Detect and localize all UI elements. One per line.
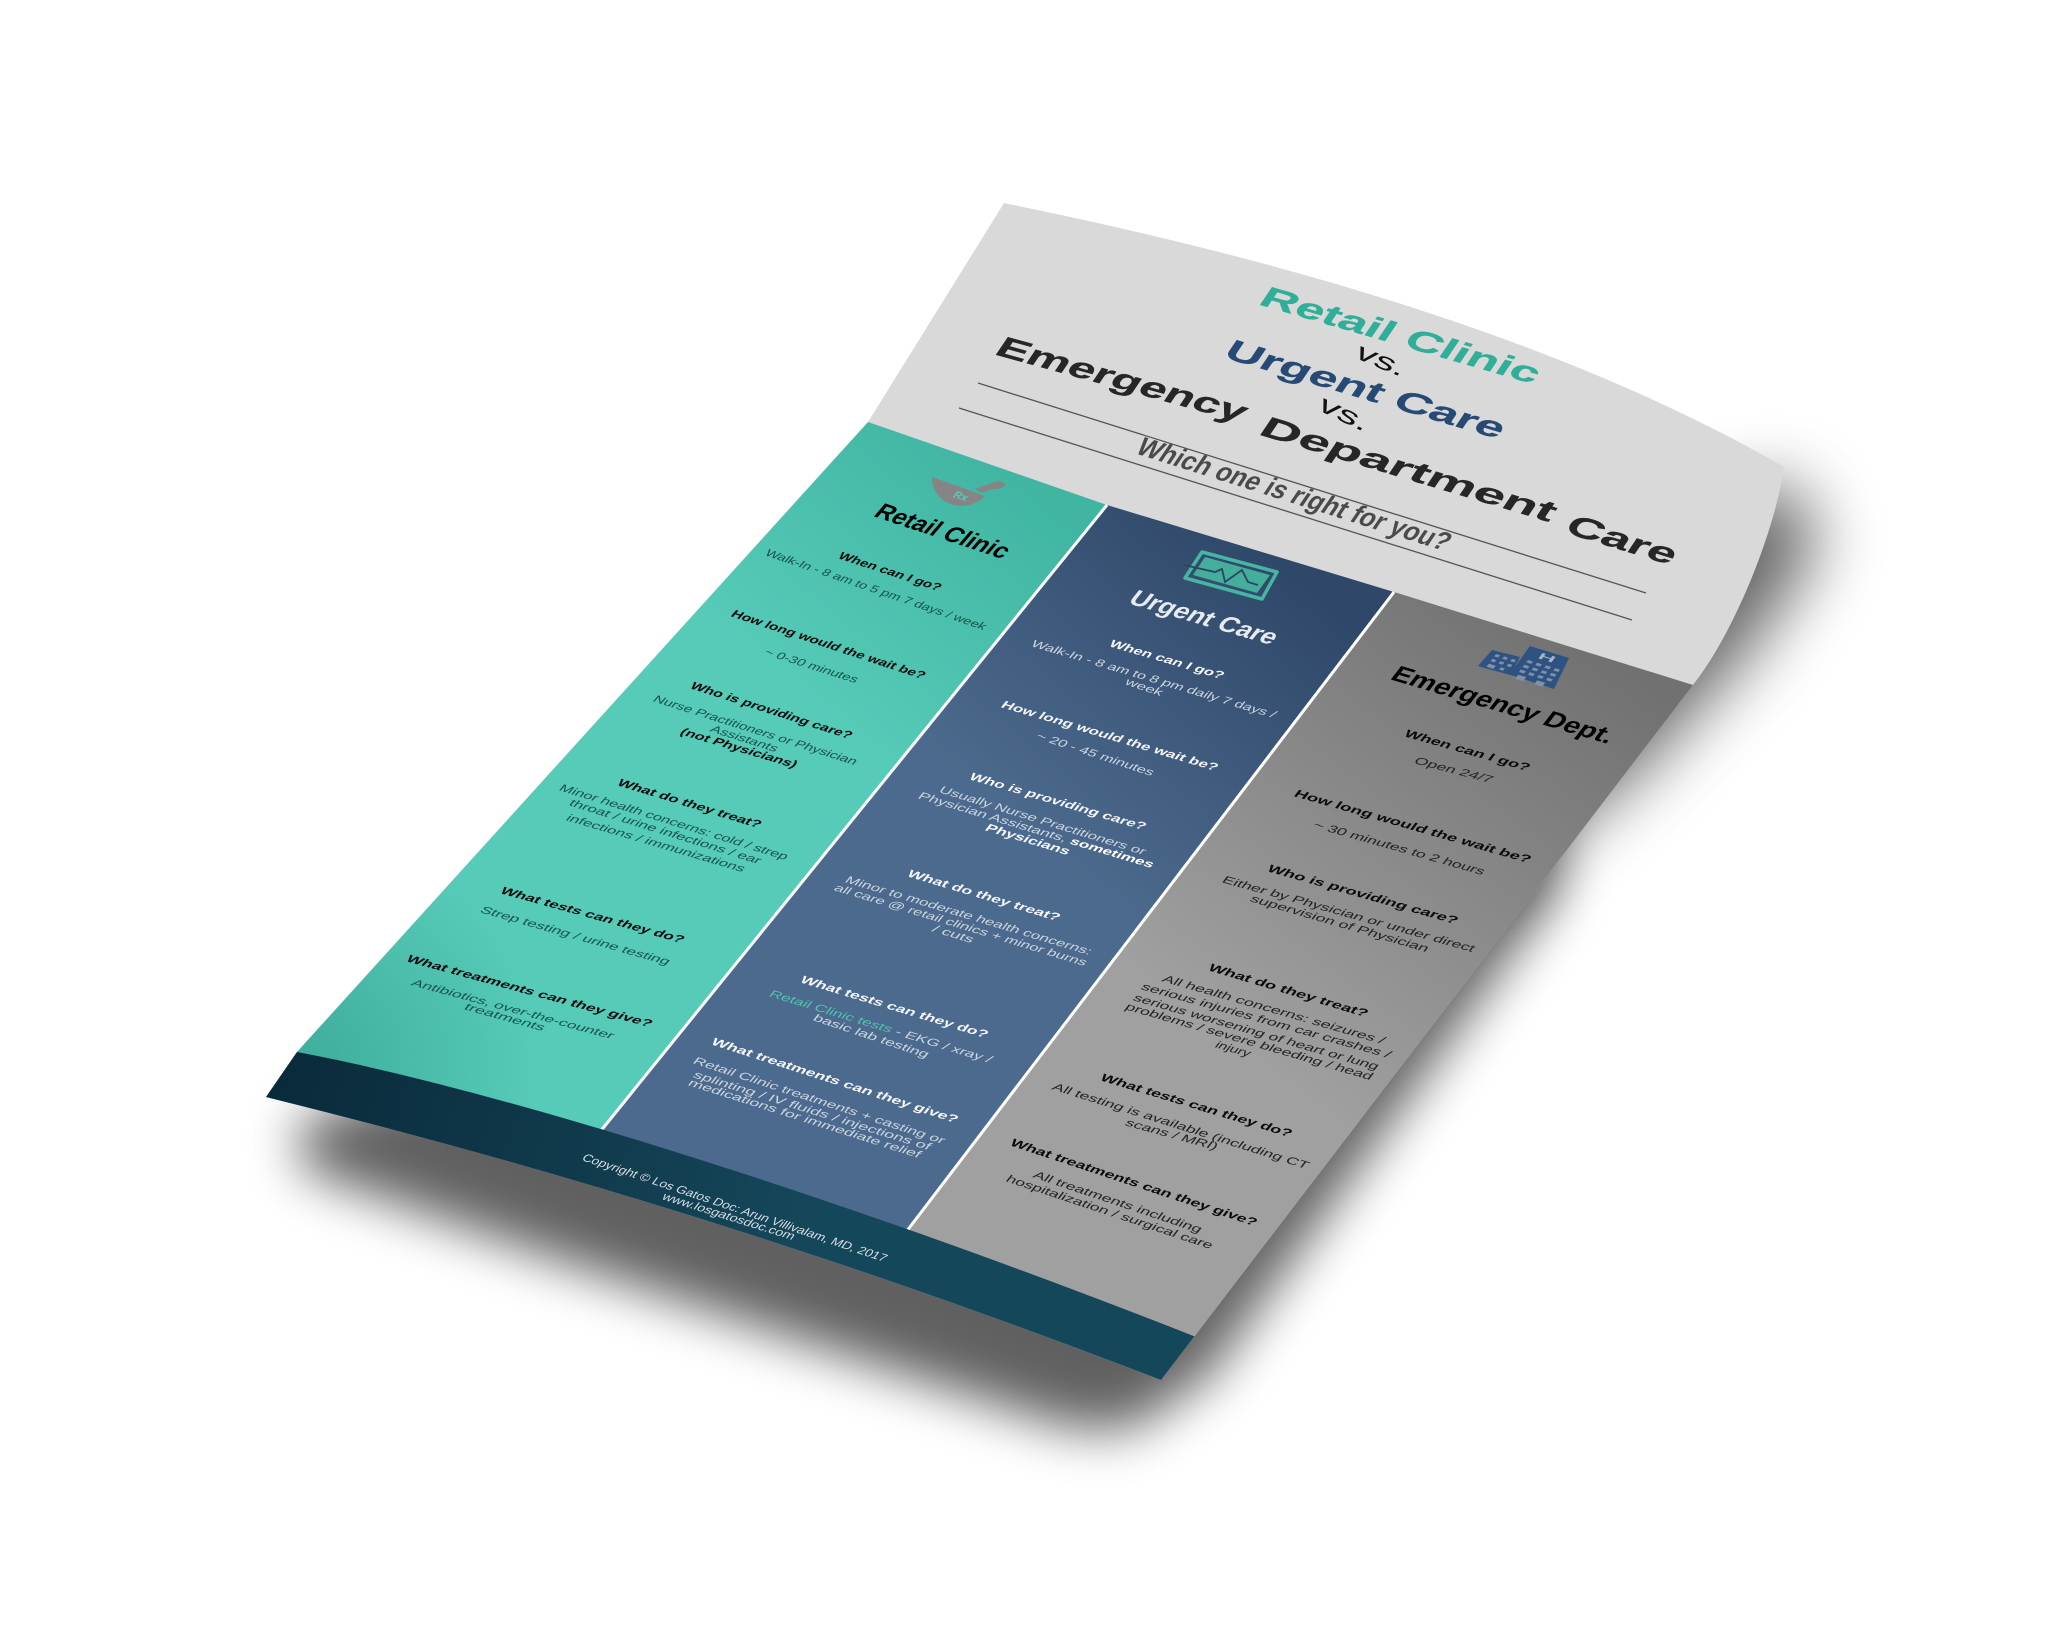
who provides care: Who is providing care? [687, 680, 856, 741]
wait time: How long would the wait be? [728, 608, 929, 681]
icon: mortar and pestle [932, 477, 1005, 506]
who provides care: supervision of Physician [1247, 894, 1431, 954]
when can I go: When can I go? [1401, 727, 1534, 773]
panel: footer band [266, 1052, 1194, 1380]
title: vs. [1350, 339, 1413, 382]
panel: retail clinic column [240, 422, 1107, 1145]
what they treat: all care @ retail clinics + minor burns [831, 883, 1090, 968]
treatments [1003, 1136, 1261, 1251]
wait time [728, 608, 929, 685]
column heading: Retail Clinic: Retail Clinic [869, 499, 1017, 564]
title: Emergency [989, 331, 1257, 428]
treatments: What treatments can they give? [708, 1035, 962, 1125]
treatments: splinting / IV fluids / injections of [690, 1070, 935, 1153]
treatments: Retail Clinic treatments + casting or [690, 1056, 948, 1146]
who provides care: Assistants [707, 724, 781, 754]
when can I go [762, 548, 989, 632]
tests: Retail Clinic tests - EKG / xray / [766, 989, 996, 1066]
icon: ECG monitor [1184, 552, 1277, 599]
who provides care: Who is providing care? [1264, 862, 1462, 926]
who provides care: Nurse Practitioners or Physician [650, 694, 860, 767]
who provides care [1219, 862, 1479, 955]
tests: scans / MRI) [1122, 1118, 1221, 1152]
what they treat: What do they treat? [904, 867, 1064, 923]
icon: hospital building [1478, 646, 1569, 689]
treatments [403, 953, 656, 1041]
what they treat: throat / urine infections / ear [566, 798, 764, 866]
tests: Strep testing / urine testing [477, 905, 673, 967]
when can I go: When can I go? [835, 550, 945, 593]
icon: mortar and pestle: Rx [950, 490, 972, 504]
what they treat: problems / severe bleeding / head [1122, 1002, 1375, 1082]
tests: basic lab testing [810, 1013, 932, 1060]
tests: What tests can they do? [497, 885, 688, 945]
what they treat: Minor health concerns: cold / strep [556, 783, 791, 862]
treatments: What treatments can they give? [1007, 1136, 1261, 1228]
tests [766, 973, 996, 1066]
who provides care: Physician Assistants, sometimes [915, 791, 1157, 870]
treatments: What treatments can they give? [403, 953, 656, 1029]
poster sheet [266, 203, 1783, 1380]
paper drop shadow: lower edge [300, 560, 1560, 1430]
what they treat: serious worsening of heart or lung [1130, 993, 1381, 1072]
who provides care: Usually Nurse Practitioners or [936, 785, 1149, 857]
when can I go [1401, 727, 1534, 785]
wait time [998, 698, 1222, 778]
retail clinic content [403, 477, 1017, 1041]
who provides care: Who is providing care? [966, 770, 1150, 832]
wait time: ~ 20 - 45 minutes [1033, 731, 1157, 778]
who provides care [650, 680, 860, 770]
column heading: Emergency Dept.: Emergency Dept. [1385, 662, 1621, 749]
title: Urgent Care [1218, 334, 1514, 445]
what they treat [1122, 961, 1395, 1082]
icon: hospital building: H [1535, 652, 1558, 665]
when can I go: When can I go? [1106, 637, 1228, 681]
urgent care content [685, 552, 1285, 1161]
footer copyright [579, 1151, 891, 1265]
who provides care [915, 770, 1157, 870]
what they treat: What do they treat? [614, 777, 765, 830]
paper drop shadow: right edge [1480, 480, 1820, 900]
title: Care [1559, 509, 1686, 571]
title: Retail Clinic [1253, 281, 1549, 390]
when can I go: Walk-In - 8 am to 8 pm daily 7 days / [1028, 639, 1280, 721]
title: Department [1253, 411, 1565, 528]
tests [477, 885, 688, 967]
who provides care: (not Physicians) [677, 726, 801, 770]
when can I go: week [1121, 677, 1166, 698]
wait time [1291, 787, 1535, 877]
tests [1049, 1071, 1311, 1171]
what they treat: injury [1212, 1040, 1254, 1059]
what they treat: serious injuries from car crashes / [1138, 982, 1395, 1061]
what they treat [556, 777, 791, 874]
when can I go: Walk-In - 8 am to 5 pm 7 days / week [762, 548, 989, 632]
what they treat: Minor to moderate health concerns: [842, 875, 1095, 957]
treatments: Antibiotics, over-the-counter [408, 978, 617, 1041]
panel: emergency department column [910, 592, 1693, 1336]
wait time: ~ 30 minutes to 2 hours [1310, 820, 1488, 877]
wait time: ~ 0-30 minutes [761, 647, 861, 685]
when can I go [1028, 637, 1280, 721]
treatments: medications for immediate relief [685, 1078, 925, 1161]
treatments: treatments [461, 1002, 548, 1033]
title [989, 281, 1686, 571]
column heading: Urgent Care: Urgent Care [1123, 586, 1285, 650]
panel: header background [347, 203, 1783, 1380]
tests: What tests can they do? [797, 973, 992, 1040]
emergency department content [1003, 646, 1621, 1251]
title: vs. [1313, 391, 1376, 437]
what they treat: infections / immunizations [563, 813, 748, 874]
footer copyright: www.losgatosdoc.com [658, 1190, 799, 1242]
panel: urgent care column [590, 505, 1394, 1245]
when can I go: Open 24/7 [1411, 756, 1495, 785]
what they treat: What do they treat? [1205, 961, 1372, 1019]
what they treat: / cuts [929, 924, 977, 945]
treatments: hospitalization / surgical care [1003, 1174, 1215, 1251]
what they treat [831, 867, 1095, 968]
tests: All testing is available (including CT [1049, 1082, 1311, 1171]
tests: What tests can they do? [1097, 1071, 1296, 1139]
text: Copyright © Los Gatos Doc: Arun Villivalam, MD, 2017 [579, 1151, 891, 1265]
who provides care: Either by Physician or under direct [1219, 875, 1479, 955]
treatments: All treatments including [1030, 1170, 1204, 1235]
what they treat: All health concerns: seizures / [1159, 974, 1389, 1047]
who provides care: Physicians [982, 821, 1074, 857]
wait time: How long would the wait be? [998, 698, 1222, 773]
treatments [685, 1035, 962, 1161]
wait time: How long would the wait be? [1291, 787, 1535, 865]
